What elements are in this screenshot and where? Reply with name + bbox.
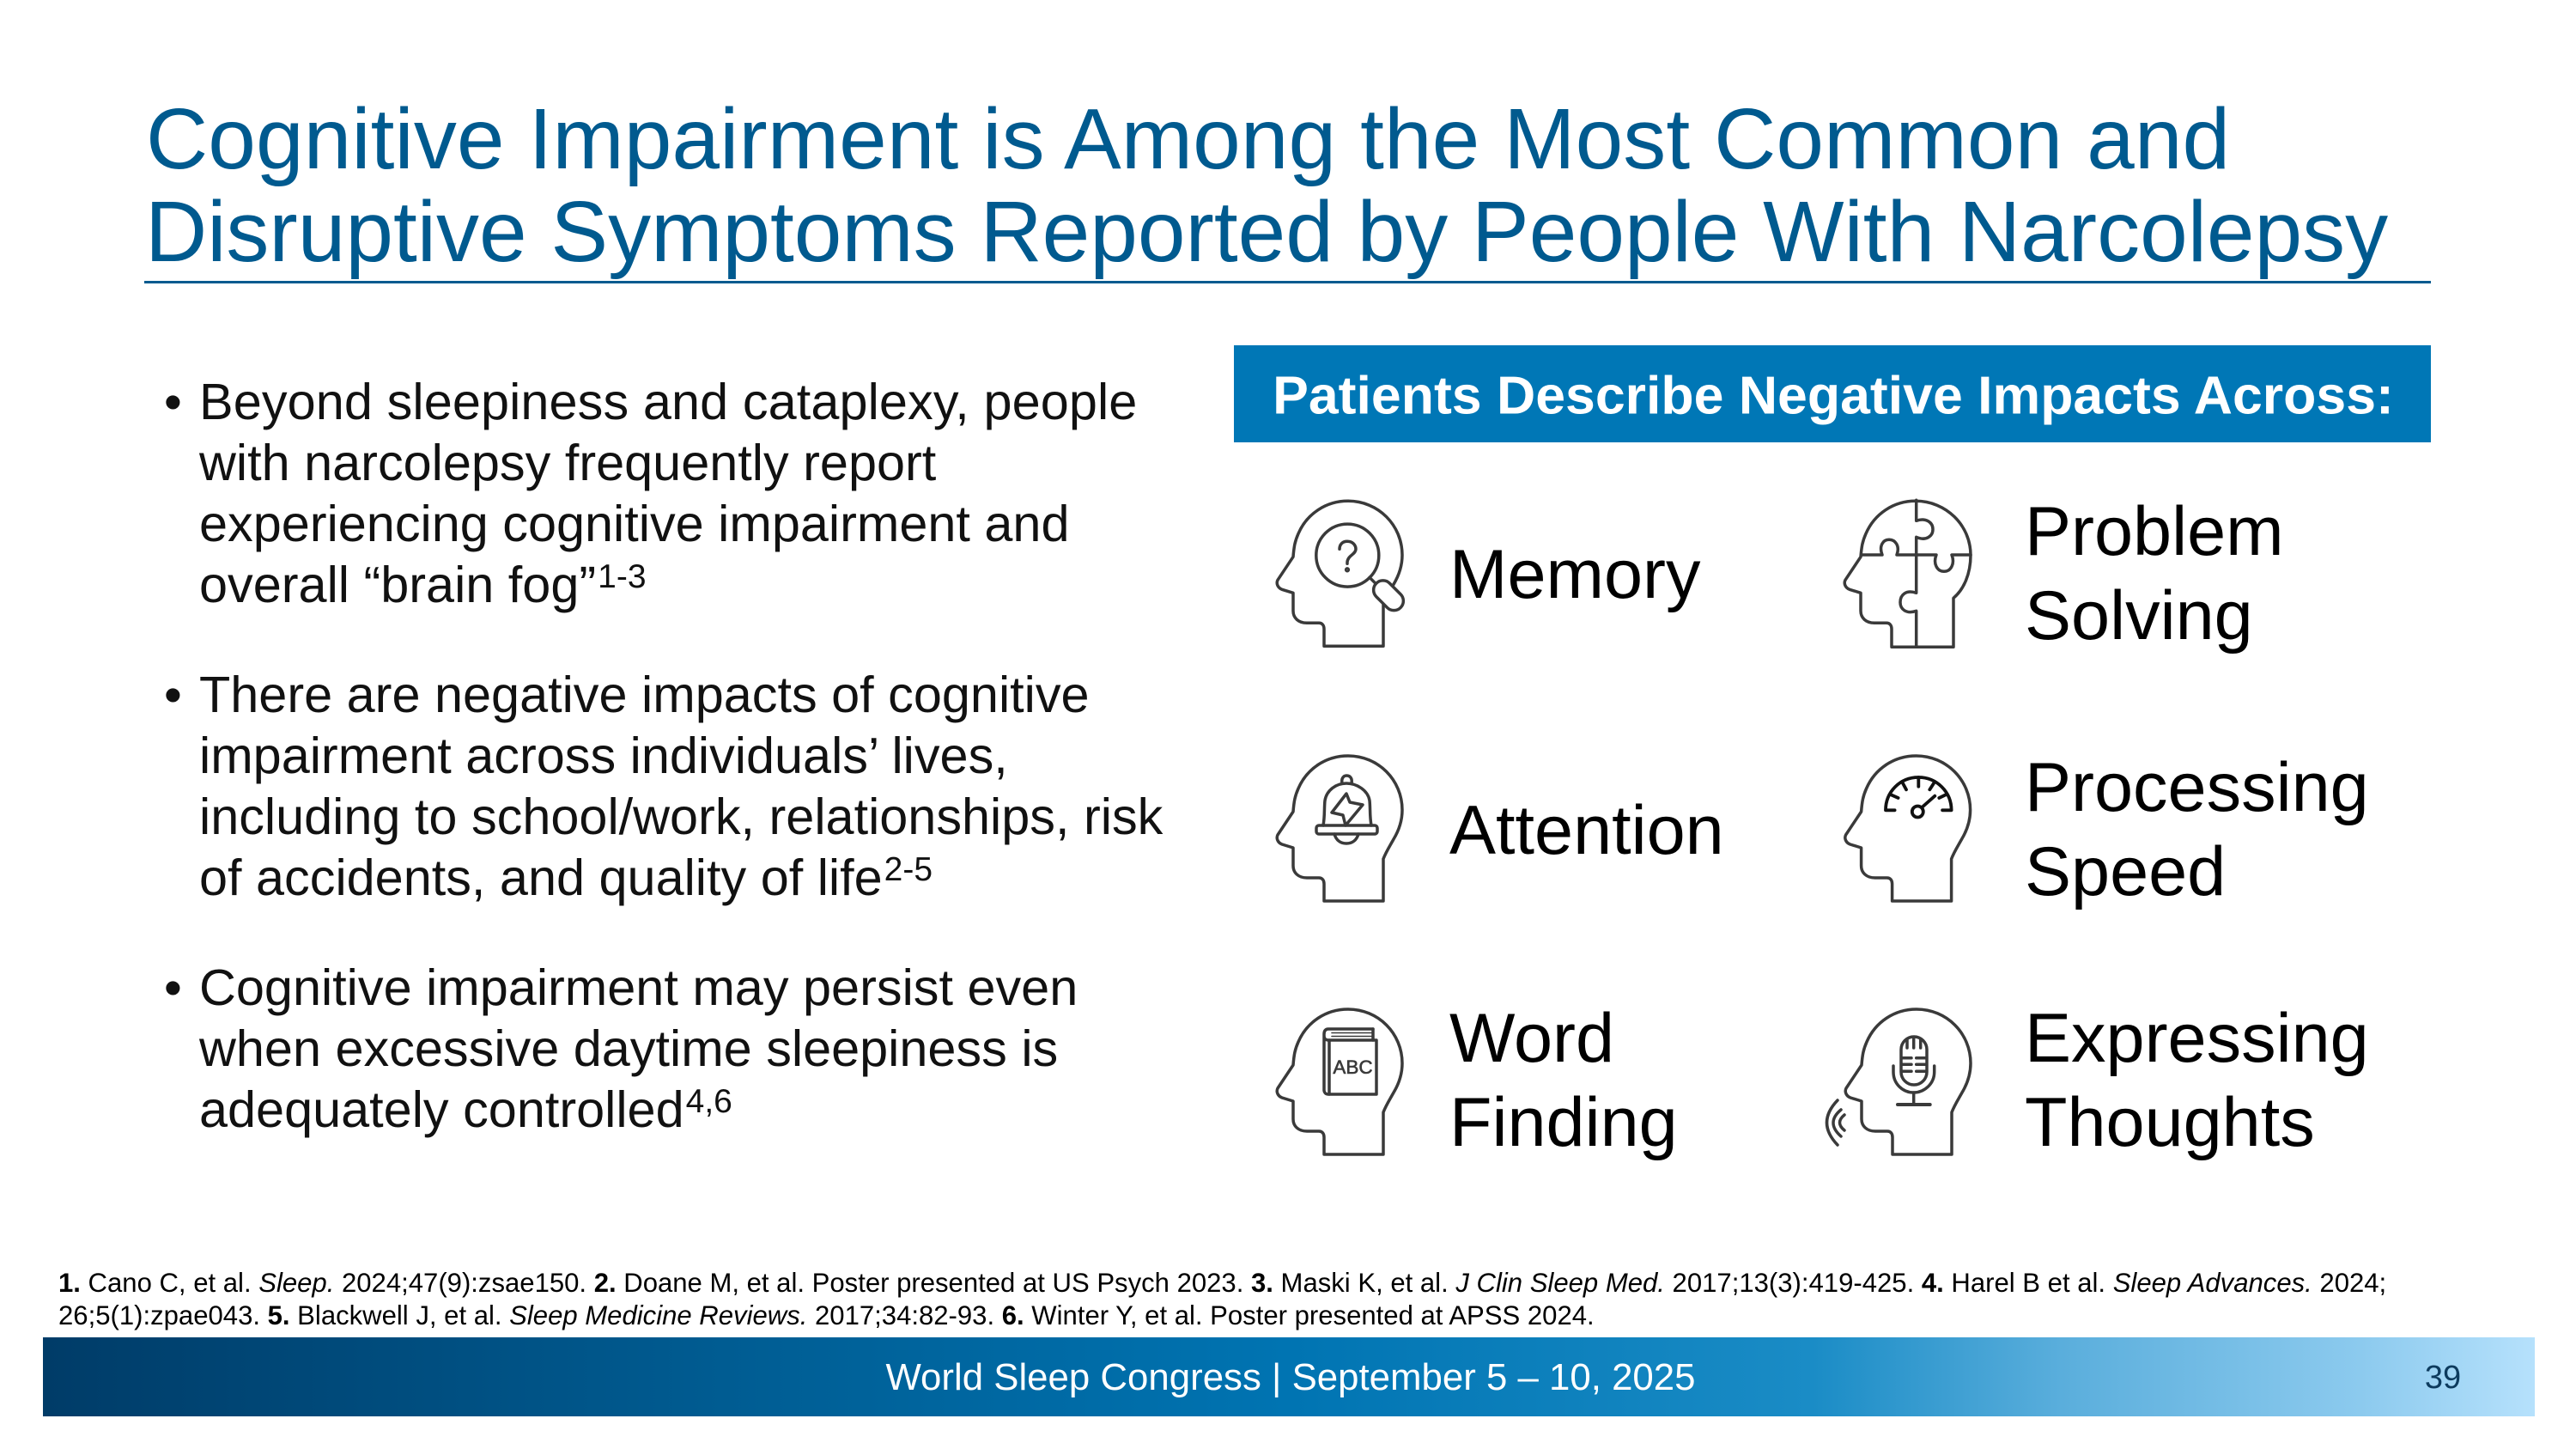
label: problem solving: [2025, 493, 2284, 654]
text block: key points: [164, 373, 1163, 1138]
footer text: World Sleep Congress | September 5 – 10, 2025: [885, 1356, 1696, 1398]
title: Disruptive Symptoms Reported by People With Narcolepsy: [145, 184, 2388, 280]
label: word finding: Word: [1449, 1000, 1614, 1077]
label: word finding: [1449, 1000, 1678, 1161]
bullet 2: There are negative impacts of cognitive: [199, 666, 1090, 723]
bullet 2: [164, 666, 1163, 906]
panel header: Patients Describe Negative Impacts Across:: [1273, 366, 2394, 426]
label: processing speed: Processing: [2025, 749, 2369, 826]
label: expressing thoughts: Thoughts: [2025, 1084, 2315, 1161]
references: [58, 1268, 2386, 1330]
label: processing speed: Speed: [2025, 833, 2226, 910]
label: memory: Memory: [1449, 536, 1701, 613]
bullet 2: impairment across individuals’ lives,: [199, 727, 1008, 784]
icon: word finding head with book: [1277, 1009, 1402, 1154]
references: 1. Cano C, et al. Sleep. 2024;47(9):zsae150. 2. Doane M, et al. Poster presented at US Psych 2023. 3. Maski K, et al. J Clin Sleep Med. 2017;13(3):419-425. 4. Harel B et al. Sleep Advances. 2024;: [58, 1268, 2386, 1298]
icon: memory head with magnifier: [1277, 501, 1407, 646]
label: processing speed: [2025, 749, 2369, 910]
panel header: [1234, 345, 2431, 442]
bullet 3: adequately controlled: [199, 1081, 684, 1138]
title: Cognitive Impairment is Among the Most Common and: [146, 91, 2230, 187]
bullet 2: •: [164, 666, 182, 723]
page number: 39: [2425, 1360, 2461, 1396]
label: word finding: Finding: [1449, 1084, 1678, 1161]
bullet 1: Beyond sleepiness and cataplexy, people: [199, 373, 1137, 430]
label: expressing thoughts: [2025, 1000, 2369, 1161]
bullet 3: when excessive daytime sleepiness is: [198, 1020, 1058, 1077]
bullet 1: •: [164, 373, 182, 430]
bullet 3: 4,6: [686, 1083, 732, 1120]
label: problem solving: Solving: [2025, 577, 2253, 654]
bullet 1: experiencing cognitive impairment and: [199, 495, 1070, 552]
icon: problem solving puzzle head: [1844, 500, 1971, 647]
bullet 2: including to school/work, relationships, risk: [199, 788, 1163, 845]
bullet 2: of accidents, and quality of life: [199, 849, 883, 906]
bullet 1: 1-3: [598, 558, 647, 595]
icon: processing speed head with gauge: [1845, 756, 1971, 901]
bullet 2: 2-5: [884, 851, 933, 888]
icon: attention head with bell: [1277, 756, 1402, 901]
label: attention: Attention: [1449, 792, 1724, 869]
bullet 1: overall “brain fog”: [199, 556, 596, 613]
icon: expressing thoughts head with microphone: [1827, 1009, 1971, 1154]
icon: word finding head with book: ABC: [1333, 1056, 1373, 1078]
label: problem solving: Problem: [2025, 493, 2284, 570]
label: expressing thoughts: Expressing: [2025, 1000, 2369, 1077]
bullet 3: Cognitive impairment may persist even: [199, 959, 1078, 1016]
bullet 1: with narcolepsy frequently report: [198, 434, 937, 491]
title: [145, 91, 2388, 280]
bullet 1: [164, 373, 1137, 613]
footer bar: [43, 1337, 2535, 1416]
bullet 3: [164, 959, 1078, 1138]
bullet 3: •: [164, 959, 182, 1016]
references: 26;5(1):zpae043. 5. Blackwell J, et al. Sleep Medicine Reviews. 2017;34:82-93. 6. Winter Y, et al. Poster presented at APSS 2024.: [58, 1300, 1595, 1330]
